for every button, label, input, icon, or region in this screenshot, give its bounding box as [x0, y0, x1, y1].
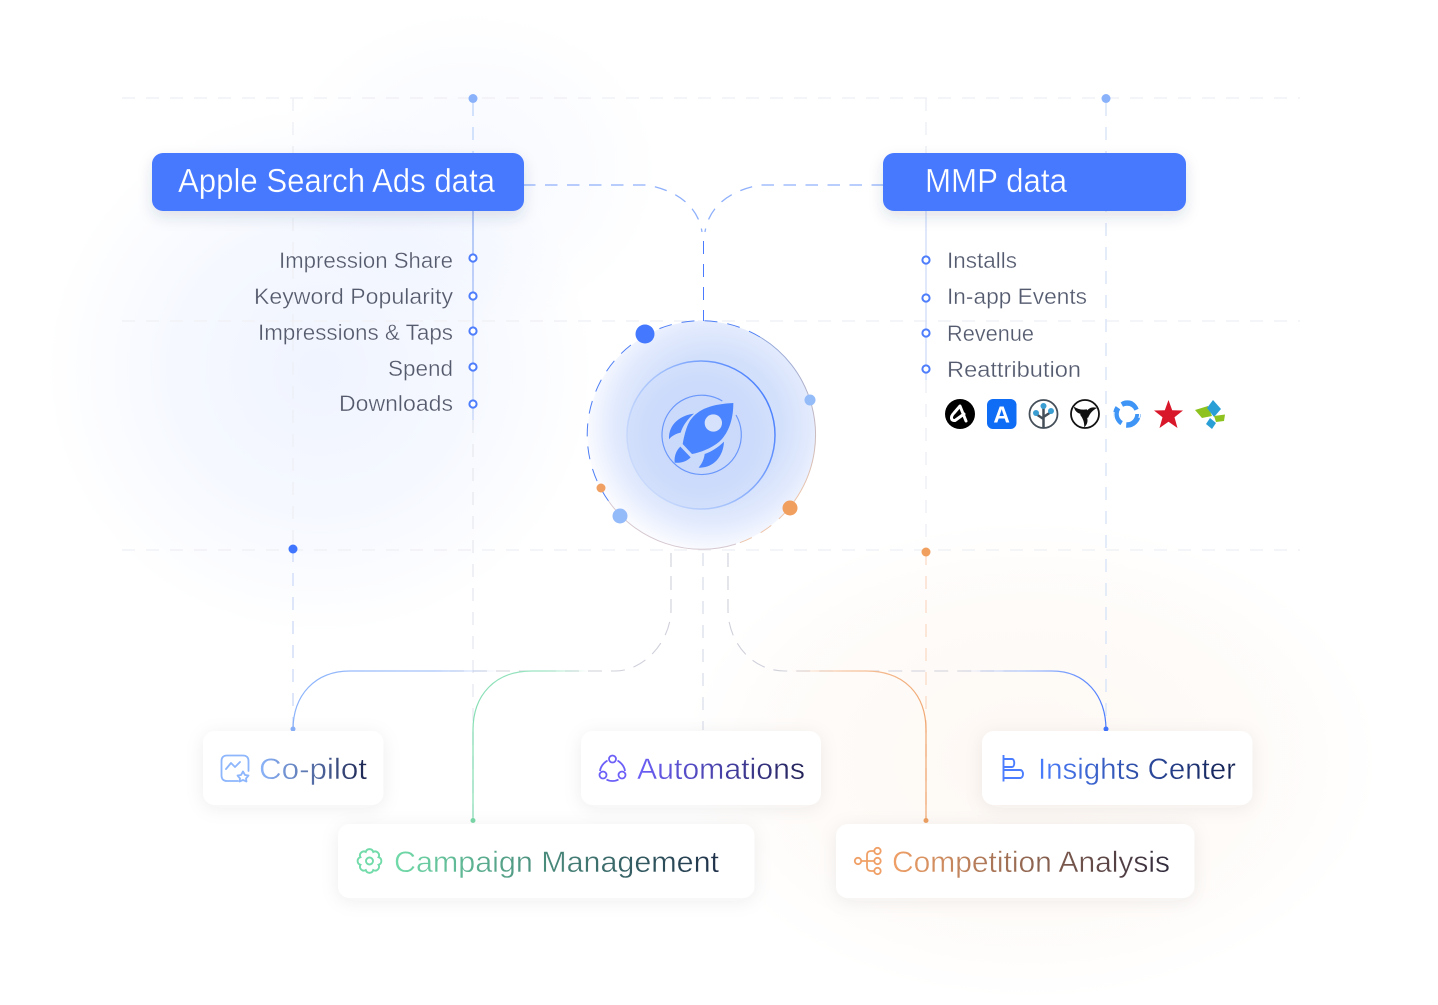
label: Automations: Automations: [637, 753, 805, 786]
orbit dots: [596, 324, 816, 524]
label: Campaign Management: Campaign Management: [394, 846, 720, 879]
orbit ring: [587, 321, 816, 549]
panel: Apple Search Ads data: [152, 153, 524, 211]
connector: rocket to products: [290, 553, 1108, 823]
inner disc: [627, 361, 775, 509]
icon: Branch logo: [1030, 400, 1058, 428]
connector: data sources to rocket: [523, 185, 884, 321]
label: Insights Center: Insights Center: [1038, 753, 1236, 786]
list: Apple Search Ads metrics: [254, 248, 477, 416]
icon: gear: [358, 849, 381, 873]
list: MMP metrics: Reattribution: [947, 357, 1081, 382]
icon: Kochava diamonds logo: [1195, 400, 1225, 429]
card: Competition Analysis: [836, 824, 1194, 898]
icon: branching tree: [855, 848, 881, 874]
label: Competition Analysis: Competition Analysis: [892, 846, 1170, 879]
icon: cycle nodes: [600, 756, 626, 781]
list: Apple Search Ads metrics: Impression Share: [279, 248, 453, 273]
data stem: MMP: [925, 211, 927, 380]
list: Apple Search Ads metrics: Impressions & Taps: [258, 320, 453, 345]
card: Campaign Management: [338, 824, 754, 898]
list: MMP metrics: Revenue: [947, 321, 1034, 346]
central rocket hub: [587, 321, 816, 549]
icon: chart with star: [222, 756, 248, 782]
icon: App store logo: [987, 399, 1016, 429]
card: Co-pilot: [203, 731, 384, 805]
heading: Apple Search Ads data: Apple Search Ads data: [178, 162, 496, 199]
icon: Airbridge swirl logo: [1114, 400, 1140, 427]
icon: App store logo: A: [993, 402, 1010, 428]
list: Apple Search Ads metrics: Keyword Popularity: [254, 284, 453, 309]
grid lines: [122, 98, 1300, 820]
label: Co-pilot: Co-pilot: [259, 753, 368, 786]
card: Insights Center: [982, 731, 1252, 805]
outer disc: [588, 321, 816, 549]
card: Automations: [581, 731, 821, 805]
list: Apple Search Ads metrics: Downloads: [339, 391, 453, 416]
heading: MMP data: MMP data: [925, 162, 1068, 199]
list: MMP metrics: In-app Events: [947, 284, 1087, 309]
list: MMP metrics: [922, 248, 1087, 382]
icon: Red star logo: [1154, 400, 1183, 428]
grid dots: [288, 94, 1110, 556]
icon: bars: [1004, 755, 1023, 782]
icon: Adjust logo: [945, 399, 975, 429]
list: Apple Search Ads metrics: Spend: [388, 356, 453, 381]
panel: MMP data: [883, 153, 1186, 211]
MMP logos: [945, 399, 1225, 429]
list: MMP metrics: Installs: [947, 248, 1017, 273]
icon: Tenjin logo: [1071, 400, 1099, 428]
icon: rocket: [662, 395, 741, 475]
data stem: Apple Search Ads: [472, 211, 474, 420]
